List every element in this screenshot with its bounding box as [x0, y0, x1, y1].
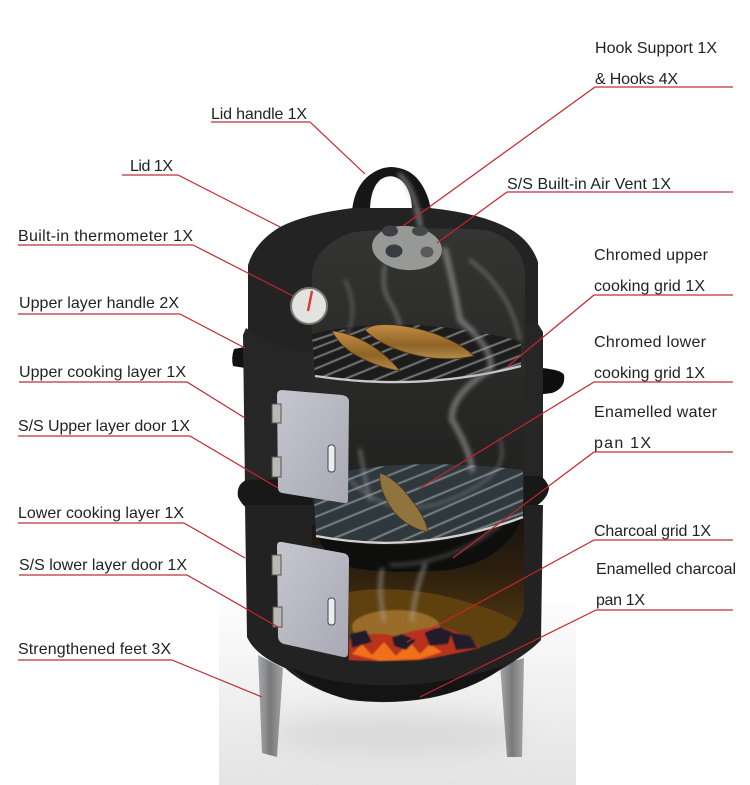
- charcoal with embers: [349, 610, 480, 661]
- thermometer: [291, 288, 327, 324]
- handle: upper left: [232, 347, 245, 368]
- label: lid: [122, 158, 280, 227]
- label: lid handle: Lid handle 1X: [211, 106, 307, 123]
- label: charcoal pan: pan 1X: [596, 592, 645, 609]
- label: air vent: [437, 176, 733, 243]
- label: upper cooking layer: [19, 364, 245, 418]
- label: thermometer: Built-in thermometer 1X: [18, 228, 193, 245]
- label: upper layer handle: Upper layer handle 2X: [19, 295, 179, 312]
- label: upper grid: cooking grid 1X: [594, 278, 705, 295]
- leg: right: [500, 658, 524, 757]
- upper cooking grid: [312, 324, 522, 384]
- upper door: [272, 390, 349, 503]
- floor shadow: [265, 715, 525, 755]
- water pan: [318, 518, 522, 572]
- chromed rim: [316, 517, 523, 543]
- label: lower cooking layer: [18, 505, 245, 558]
- fish: upper grid: [332, 325, 474, 371]
- floor backdrop: [219, 590, 576, 785]
- lower cooking grid: [314, 464, 524, 544]
- label: lower grid: [420, 334, 733, 488]
- lower chamber interior: [312, 505, 524, 661]
- label: upper door: [18, 418, 278, 488]
- label: upper grid: [507, 247, 733, 367]
- enamelled charcoal pan: [349, 589, 517, 660]
- label: charcoal grid: Charcoal grid 1X: [594, 523, 711, 540]
- label: lower grid: cooking grid 1X: [594, 365, 705, 382]
- label: lid: Lid 1X: [130, 158, 173, 175]
- hinges: [272, 404, 281, 477]
- lid handle: [352, 167, 431, 211]
- handle: upper right: [500, 368, 564, 397]
- label: lower cooking layer: Lower cooking layer 1X: [18, 505, 184, 522]
- label: charcoal grid: [407, 523, 733, 642]
- label: lid handle: [211, 106, 365, 174]
- label: lower door: [19, 557, 278, 627]
- lower cooking layer: [245, 505, 543, 702]
- label: charcoal pan: Enamelled charcoal: [596, 561, 736, 578]
- label: lower door: S/S lower layer door 1X: [19, 557, 187, 574]
- label: water pan: Enamelled water: [594, 404, 718, 421]
- label: strengthened feet: Strengthened feet 3X: [18, 641, 171, 658]
- label: water pan: [453, 404, 733, 558]
- label: upper door: S/S Upper layer door 1X: [18, 418, 190, 435]
- middle ring: [238, 476, 549, 514]
- label: upper layer handle: [18, 295, 245, 348]
- door handle: [328, 598, 335, 625]
- label: charcoal pan: [420, 561, 736, 697]
- door handle: [328, 445, 335, 472]
- fish: lower grid: [380, 473, 428, 532]
- label: hook support: [403, 40, 733, 226]
- label: upper grid: Chromed upper: [594, 247, 709, 264]
- label: lower grid: Chromed lower: [594, 334, 707, 351]
- hinges: [272, 555, 282, 627]
- air vent with hook support: [370, 223, 444, 273]
- label: thermometer: [18, 228, 293, 296]
- upper cooking layer: [243, 324, 543, 488]
- chromed rim: [315, 366, 521, 382]
- label: upper cooking layer: Upper cooking layer 1X: [19, 364, 186, 381]
- lower door: [272, 542, 349, 657]
- label: water pan: pan 1X: [594, 435, 651, 452]
- bowl shade: [292, 665, 505, 701]
- label: strengthened feet: [18, 641, 262, 697]
- lid: [248, 208, 538, 360]
- upper chamber interior: [312, 228, 525, 520]
- smoke: [345, 175, 520, 620]
- smoker body: [238, 208, 549, 702]
- label: air vent: S/S Built-in Air Vent 1X: [507, 176, 671, 193]
- leg: left: [258, 655, 283, 757]
- label: hook support: & Hooks 4X: [595, 71, 678, 88]
- label: hook support: Hook Support 1X: [595, 40, 717, 57]
